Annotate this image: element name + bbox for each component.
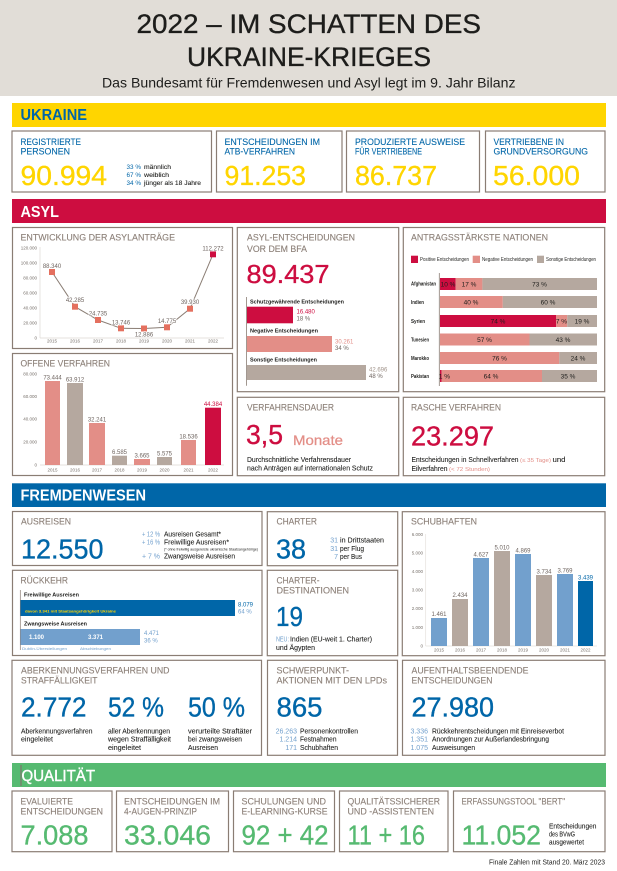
- bar chart: 2020: [159, 468, 170, 472]
- stacked bar chart: 43 %: [556, 337, 571, 344]
- stacked bar chart: 73 %: [532, 282, 547, 288]
- big number: 91.253: [224, 160, 306, 191]
- section heading: Asyl: [12, 199, 606, 223]
- section heading: Qualität: QUALITÄT: [22, 767, 95, 785]
- panel: Qualitätssicherer und -assistenten: [340, 791, 448, 852]
- stacked bar chart: Pakistan: [411, 374, 429, 380]
- bar chart: 2021: [560, 648, 571, 652]
- panel: Asyl-Entscheidungen vor dem BFA: [237, 228, 399, 392]
- description: [412, 457, 566, 473]
- stacked bar chart: 40 %: [464, 300, 479, 306]
- stacked bar chart: 7 %: [556, 318, 567, 326]
- stacked bar chart: 24 %: [571, 356, 586, 362]
- section heading: Ukraine: UKRAINE: [20, 107, 87, 124]
- breakdown: weiblich: [143, 172, 169, 179]
- panel: Schulungen und E-Learning-Kurse: [234, 791, 334, 852]
- stacked bar chart: Syrien: [411, 319, 425, 325]
- header: [0, 0, 617, 96]
- panel: evaluierte Entscheidungen: [12, 791, 112, 852]
- panel: Aberkennungsverfahren und Straffälligkeit: STRAFFÄLLIGKEIT: [21, 675, 98, 686]
- panel: Charter-Destinationen: DESTINATIONEN: [276, 586, 349, 597]
- line chart: 2019: [139, 338, 150, 344]
- panel: Schwerpunktaktionen: [268, 660, 398, 755]
- big number: 12.550: [21, 533, 104, 564]
- big number: 7.088: [20, 819, 88, 850]
- bar chart: 63.912: [66, 378, 85, 384]
- stacked bar chart: Afghanistan: [411, 282, 436, 288]
- panel: registrierte Personen: [12, 131, 212, 192]
- breakdown: 31: [330, 546, 338, 553]
- bar chart: [412, 532, 597, 652]
- stat: Aberkennungsverfahren: [21, 691, 93, 744]
- title: UKRAINE-KRIEGES: [187, 42, 431, 72]
- bar chart: 4.000: [412, 569, 423, 574]
- stacked bar chart: 60 %: [541, 300, 556, 306]
- line chart: 2020: [162, 338, 173, 344]
- line chart: 2022: [208, 338, 219, 344]
- breakdown: 34 %: [126, 180, 141, 187]
- stat: verurteilte Straftäter: 50 %: [188, 691, 245, 722]
- description: Indien (EU-weit 1. Charter): [290, 637, 372, 644]
- panel: antragsstärkste Nationen: [403, 228, 605, 392]
- stacked bar chart: [411, 273, 597, 386]
- panel: Aberkennungsverfahren und Straffälligkeit: [12, 660, 262, 755]
- change list: + 16 %: [142, 540, 160, 547]
- description: nach Anträgen auf internationalen Schutz: [247, 466, 373, 473]
- description: (< 72 Stunden): [449, 467, 490, 473]
- breakdown: Anordnungen zur Außerlandesbringung: [432, 737, 549, 744]
- bar chart: 2022: [580, 648, 591, 652]
- panel: offene Verfahren: OFFENE VERFAHREN: [20, 359, 110, 370]
- horizontal bar chart: 8.079: [238, 603, 254, 609]
- bar chart: 2015: [434, 648, 445, 652]
- breakdown: Personenkontrollen: [300, 728, 358, 735]
- panel: Charter: [267, 512, 398, 566]
- bar chart: 2016: [455, 648, 466, 652]
- panel: Erfassungstool BERT: ERFASSUNGSTOOL "BERT": [462, 796, 565, 807]
- line chart: 100.000: [21, 260, 37, 266]
- bar chart: 2019: [518, 648, 529, 652]
- breakdown: in Drittstaaten: [340, 538, 384, 545]
- bar chart: 6.000: [412, 532, 423, 537]
- bar chart: 0: [420, 644, 423, 648]
- horizontal bar chart: 1.100: [29, 635, 45, 641]
- change list: [142, 532, 258, 560]
- line chart: 42.285: [66, 298, 85, 304]
- panel: 4-Augen-Prinzip: 4-AUGEN-PRINZIP: [124, 806, 197, 817]
- line chart: 40.000: [23, 306, 37, 310]
- stat: Aberkennungsverfahren: eingeleitet: [21, 737, 53, 744]
- panel: Qualitätssicherer und -assistenten: QUALITÄTSSICHERER: [348, 796, 440, 807]
- description: des BVwG: [549, 832, 575, 838]
- legend: Positive Entscheidungen: [420, 257, 469, 263]
- section heading: Fremdenwesen: [12, 483, 606, 507]
- bar chart: 2021: [183, 468, 194, 472]
- description: [276, 637, 372, 652]
- panel: Qualitätssicherer und -assistenten: UND -ASSISTENTEN: [348, 806, 434, 817]
- bar chart: 80.000: [23, 372, 37, 376]
- bar chart: 5.575: [157, 452, 173, 458]
- bar chart: 4.869: [515, 548, 531, 554]
- panel: offene Verfahren: [12, 354, 232, 476]
- line chart: 2021: [185, 338, 196, 344]
- panel: antragsstärkste Nationen: ANTRAGSSTÄRKSTE NATIONEN: [411, 233, 548, 244]
- breakdown: 7: [334, 554, 338, 561]
- description: NEU:: [276, 637, 289, 644]
- stat: Aberkennungsverfahren: 2.772: [21, 691, 86, 722]
- line chart: 39.930: [181, 300, 200, 306]
- footnote: Finale Zahlen mit Stand 20. März 2023: [489, 859, 605, 866]
- panel: produzierte Ausweise: PRODUZIERTE AUSWEISE: [355, 137, 465, 148]
- title: 2022 – IM SCHATTEN DES: [136, 9, 481, 39]
- change list: + 7 %: [142, 553, 160, 560]
- stat: wegen Straffälligkeit: eingeleitet: [108, 745, 141, 752]
- horizontal bar chart: 36 %: [144, 638, 158, 644]
- stacked bar chart: 76 %: [492, 356, 507, 362]
- stacked bar chart: Marokko: [411, 356, 429, 362]
- bar chart: 20.000: [23, 440, 37, 444]
- bar chart: 3.734: [536, 570, 552, 576]
- stacked bar chart: 74 %: [491, 318, 506, 326]
- big number: 86.737: [355, 160, 437, 191]
- panel: produzierte Ausweise: FÜR VERTRIEBENE: [355, 146, 422, 158]
- horizontal bar chart: Negative Entscheidungen: [250, 328, 319, 334]
- stat: verurteilte Straftäter: verurteilte Straftäter: [188, 728, 253, 735]
- bar chart: 32.241: [88, 418, 107, 424]
- stacked bar chart: 35 %: [561, 374, 576, 380]
- bar chart: 2020: [539, 648, 550, 652]
- legend: [411, 256, 596, 263]
- panel: Rückkehr: [12, 570, 262, 656]
- breakdown: 1.075: [410, 745, 428, 752]
- breakdown: 31: [330, 538, 338, 545]
- bar chart: 2018: [114, 468, 125, 472]
- big number: 89.437: [246, 259, 330, 289]
- description: (≤ 35 Tage): [520, 458, 551, 464]
- line chart: [21, 246, 224, 344]
- panel: rasche Verfahren: RASCHE VERFAHREN: [411, 403, 501, 414]
- breakdown: 67 %: [126, 172, 141, 179]
- big number: 33.046: [124, 819, 211, 850]
- panel: aufenthaltsbeendende Entscheidungen: AUFENTHALTSBEENDENDE: [412, 665, 528, 676]
- line chart: 24.735: [89, 312, 108, 318]
- line chart: 0: [34, 336, 37, 340]
- bar chart: 3.000: [412, 588, 423, 592]
- stat: wegen Straffälligkeit: aller Aberkennungen: [108, 728, 170, 735]
- panel: Erfassungstool BERT: [454, 791, 605, 852]
- description: ausgewertet: [549, 839, 584, 846]
- bar chart: 0: [34, 462, 37, 468]
- description: und: [552, 457, 566, 464]
- panel: ATB-Verfahren: ENTSCHEIDUNGEN IM: [224, 137, 320, 148]
- panel: Entwicklung der Asylanträge: ENTWICKLUNG DER ASYLANTRÄGE: [20, 233, 175, 244]
- bar chart: 60.000: [23, 394, 37, 399]
- line chart: 2016: [70, 338, 81, 344]
- line chart: 2015: [47, 338, 58, 344]
- section heading: Ukraine: [12, 103, 606, 127]
- horizontal bar chart: Dublin-Überstellungen: [22, 646, 67, 651]
- panel: Schulungen und E-Learning-Kurse: E-LEARNING-KURSE: [242, 806, 328, 817]
- line chart: 13.746: [112, 321, 131, 327]
- big number: 11 + 16: [348, 819, 425, 850]
- big number: 23.297: [411, 421, 494, 452]
- bar chart: 1.000: [412, 625, 423, 630]
- panel: aufenthaltsbeendende Entscheidungen: ENTSCHEIDUNGEN: [412, 675, 493, 686]
- horizontal bar chart: 34 %: [335, 346, 349, 352]
- change list: (* ohne freiwillig ausgereiste ukrainische Staatsangehörige): [164, 548, 258, 552]
- line chart: 14.775: [158, 319, 177, 325]
- big number: 38: [276, 534, 306, 565]
- stat: verurteilte Straftäter: Ausreisen: [188, 745, 218, 752]
- panel: evaluierte Entscheidungen: EVALUIERTE: [20, 796, 73, 807]
- horizontal bar chart: 48 %: [369, 374, 383, 380]
- panel: Grundversorgung: [486, 131, 605, 192]
- bar chart: 5.000: [412, 550, 423, 555]
- change list: Freiwillige Ausreisen*: [164, 540, 229, 547]
- panel: produzierte Ausweise: [346, 131, 480, 192]
- stat: wegen Straffälligkeit: [107, 691, 171, 752]
- panel: Charter: CHARTER: [276, 517, 317, 528]
- stat: wegen Straffälligkeit: 52 %: [108, 691, 164, 722]
- panel: Asyl-Entscheidungen vor dem BFA: VOR DEM BFA: [247, 244, 308, 255]
- panel: Verfahrensdauer: [237, 397, 399, 476]
- big number: 56.000: [493, 160, 580, 191]
- panel: Ausreisen: AUSREISEN: [21, 516, 71, 527]
- section heading: Fremdenwesen: FREMDENWESEN: [20, 488, 146, 505]
- panel: registrierte Personen: PERSONEN: [20, 146, 70, 158]
- stat: verurteilte Straftäter: [188, 691, 253, 752]
- breakdown: Schubhaften: [300, 745, 338, 752]
- panel: Schulungen und E-Learning-Kurse: SCHULUNGEN UND: [242, 796, 326, 807]
- breakdown: 3.336: [410, 728, 428, 735]
- big number: 19: [276, 601, 303, 632]
- bar chart: 4.627: [473, 552, 489, 558]
- bar chart: 44.384: [204, 402, 223, 408]
- horizontal bar chart: Schutzgewährende Entscheidungen: [250, 300, 345, 306]
- line chart: 112.272: [202, 247, 224, 253]
- stacked bar chart: 1 %: [439, 374, 450, 380]
- stat: wegen Straffälligkeit: wegen Straffälligkeit: [107, 737, 171, 744]
- line chart: 12.886: [135, 333, 154, 339]
- bar chart: 2019: [137, 468, 148, 472]
- horizontal bar chart: Sonstige Entscheidungen: [250, 358, 318, 364]
- breakdown: 26.263: [276, 728, 297, 735]
- breakdown: 1.351: [410, 737, 428, 744]
- panel: ATB-Verfahren: ATB-VERFAHREN: [224, 146, 295, 158]
- horizontal bar chart: 30.261: [335, 340, 354, 346]
- breakdown: [276, 728, 358, 752]
- breakdown: 171: [285, 745, 297, 752]
- horizontal bar chart: 16.480: [296, 310, 316, 316]
- breakdown: Rückkehrentscheidungen mit Einreiseverbot: [432, 728, 564, 735]
- stacked bar chart: 17 %: [462, 282, 477, 288]
- panel: Schubhaften: [402, 512, 605, 656]
- horizontal bar chart: 3.371: [88, 635, 104, 641]
- panel: evaluierte Entscheidungen: ENTSCHEIDUNGEN: [20, 806, 103, 817]
- breakdown: [126, 164, 201, 187]
- panel: Verfahrensdauer: VERFAHRENSDAUER: [247, 403, 334, 414]
- line chart: 120.000: [21, 246, 37, 250]
- bar chart: 2022: [208, 468, 219, 472]
- panel: Charter-Destinationen: CHARTER-: [276, 575, 320, 586]
- panel: ATB-Verfahren: [216, 131, 342, 192]
- stat: Aberkennungsverfahren: Aberkennungsverfahren: [21, 728, 93, 735]
- big number: 865: [276, 691, 322, 722]
- bar chart: 5.010: [494, 546, 510, 552]
- panel: Ausreisen: [12, 512, 262, 566]
- bar chart: 73.444: [43, 376, 62, 382]
- panel: Schwerpunktaktionen: SCHWERPUNKT-: [276, 665, 349, 676]
- unit: Monate: [293, 432, 343, 448]
- subtitle: Das Bundesamt für Fremdenwesen und Asyl legt im 9. Jahr Bilanz: [102, 74, 516, 90]
- bar chart: 40.000: [23, 416, 37, 422]
- horizontal bar chart: 18 %: [296, 316, 311, 322]
- breakdown: [330, 538, 384, 561]
- stacked bar chart: 57 %: [477, 337, 492, 344]
- bar chart: 2017: [476, 648, 487, 652]
- breakdown: männlich: [144, 164, 171, 171]
- description: Durchschnittliche Verfahrensdauer: [247, 457, 352, 464]
- bar chart: 18.536: [179, 434, 198, 440]
- line chart: 80.000: [23, 276, 37, 280]
- horizontal bar chart: Zwangsweise Ausreisen: [24, 622, 88, 628]
- horizontal bar chart: 42.696: [369, 368, 388, 374]
- horizontal bar chart: [20, 590, 254, 651]
- big number: 3,5: [246, 419, 283, 450]
- panel: registrierte Personen: REGISTRIERTE: [20, 137, 81, 148]
- line chart: 20.000: [23, 320, 37, 326]
- legend: Sonstige Entscheidungen: [546, 257, 596, 263]
- description: und Ägypten: [276, 644, 315, 652]
- change list: Zwangsweise Ausreisen: [164, 553, 235, 560]
- horizontal bar chart: [246, 297, 388, 386]
- panel: Grundversorgung: GRUNDVERSORGUNG: [494, 146, 588, 158]
- panel: Grundversorgung: VERTRIEBENE IN: [494, 137, 564, 148]
- description: [247, 457, 373, 473]
- panel: Rückkehr: RÜCKKEHR: [20, 576, 68, 587]
- bar chart: 2.434: [452, 593, 468, 599]
- title: [136, 9, 481, 72]
- line chart: 88.340: [43, 264, 62, 270]
- description: Entscheidungen in Schnellverfahren: [412, 457, 519, 464]
- bar chart: 2017: [92, 468, 103, 472]
- panel: Aberkennungsverfahren und Straffälligkeit: ABERKENNUNGSVERFAHREN UND: [21, 665, 170, 676]
- stacked bar chart: 10 %: [441, 282, 456, 288]
- stacked bar chart: Tunesien: [411, 338, 429, 344]
- bar chart: [23, 372, 224, 472]
- panel: aufenthaltsbeendende Entscheidungen: [402, 660, 605, 755]
- bar chart: 6.585: [112, 450, 128, 456]
- breakdown: Ausweisungen: [432, 745, 475, 752]
- description: Eilverfahren: [412, 466, 448, 473]
- big number: 92 + 42: [242, 819, 328, 850]
- change list: + 12 %: [142, 532, 160, 539]
- section heading: Asyl: ASYL: [20, 204, 59, 221]
- section heading: Qualität: [12, 763, 606, 787]
- panel: 4-Augen-Prinzip: [116, 791, 228, 852]
- description: [549, 824, 597, 846]
- panel: Charter-Destinationen: [267, 570, 398, 656]
- bar chart: 3.439: [578, 576, 594, 582]
- bar chart: 2018: [497, 648, 508, 652]
- stacked bar chart: Indien: [411, 300, 424, 306]
- breakdown: 1.214: [279, 737, 297, 744]
- bar chart: 1.461: [431, 612, 447, 618]
- stacked bar chart: 64 %: [484, 374, 499, 380]
- breakdown: per Flug: [340, 546, 364, 553]
- bar chart: 3.769: [557, 568, 573, 574]
- line chart: 2018: [116, 338, 127, 344]
- big number: 11.052: [462, 819, 541, 850]
- legend: Negative Entscheidungen: [482, 257, 533, 263]
- breakdown: [410, 728, 564, 752]
- line chart: 60.000: [23, 290, 37, 296]
- horizontal bar chart: 64 %: [238, 609, 252, 615]
- bar chart: 3.665: [134, 454, 150, 460]
- big number: 90.994: [20, 160, 107, 191]
- stacked bar chart: 19 %: [575, 318, 590, 326]
- breakdown: jünger als 18 Jahre: [143, 180, 201, 187]
- stat: verurteilte Straftäter: bei zwangsweisen: [188, 737, 242, 744]
- description: Entscheidungen: [549, 824, 597, 831]
- panel: Schwerpunktaktionen: AKTIONEN MIT DEN LPDs: [276, 675, 387, 686]
- horizontal bar chart: Freiwillige Ausreisen: [24, 592, 80, 598]
- line chart: 2017: [93, 338, 104, 344]
- horizontal bar chart: davon 3.341 mit Staatsangehörigkeit Ukraine: [25, 609, 117, 614]
- bar chart: 2015: [47, 468, 58, 472]
- breakdown: 33 %: [126, 164, 141, 171]
- horizontal bar chart: 4.471: [144, 631, 160, 637]
- panel: Asyl-Entscheidungen vor dem BFA: ASYL-ENTSCHEIDUNGEN: [247, 233, 355, 244]
- panel: Schubhaften: SCHUBHAFTEN: [411, 517, 477, 528]
- horizontal bar chart: Abschiebungen: [80, 646, 111, 651]
- panel: Entwicklung der Asylanträge: [12, 228, 232, 348]
- bar chart: 2.000: [412, 606, 423, 611]
- big number: 27.980: [412, 691, 494, 722]
- change list: Ausreisen Gesamt*: [164, 532, 221, 539]
- panel: rasche Verfahren: [403, 397, 605, 476]
- breakdown: Festnahmen: [300, 737, 337, 744]
- breakdown: per Bus: [340, 554, 362, 561]
- panel: 4-Augen-Prinzip: ENTSCHEIDUNGEN IM: [124, 796, 220, 807]
- bar chart: 2016: [70, 468, 81, 472]
